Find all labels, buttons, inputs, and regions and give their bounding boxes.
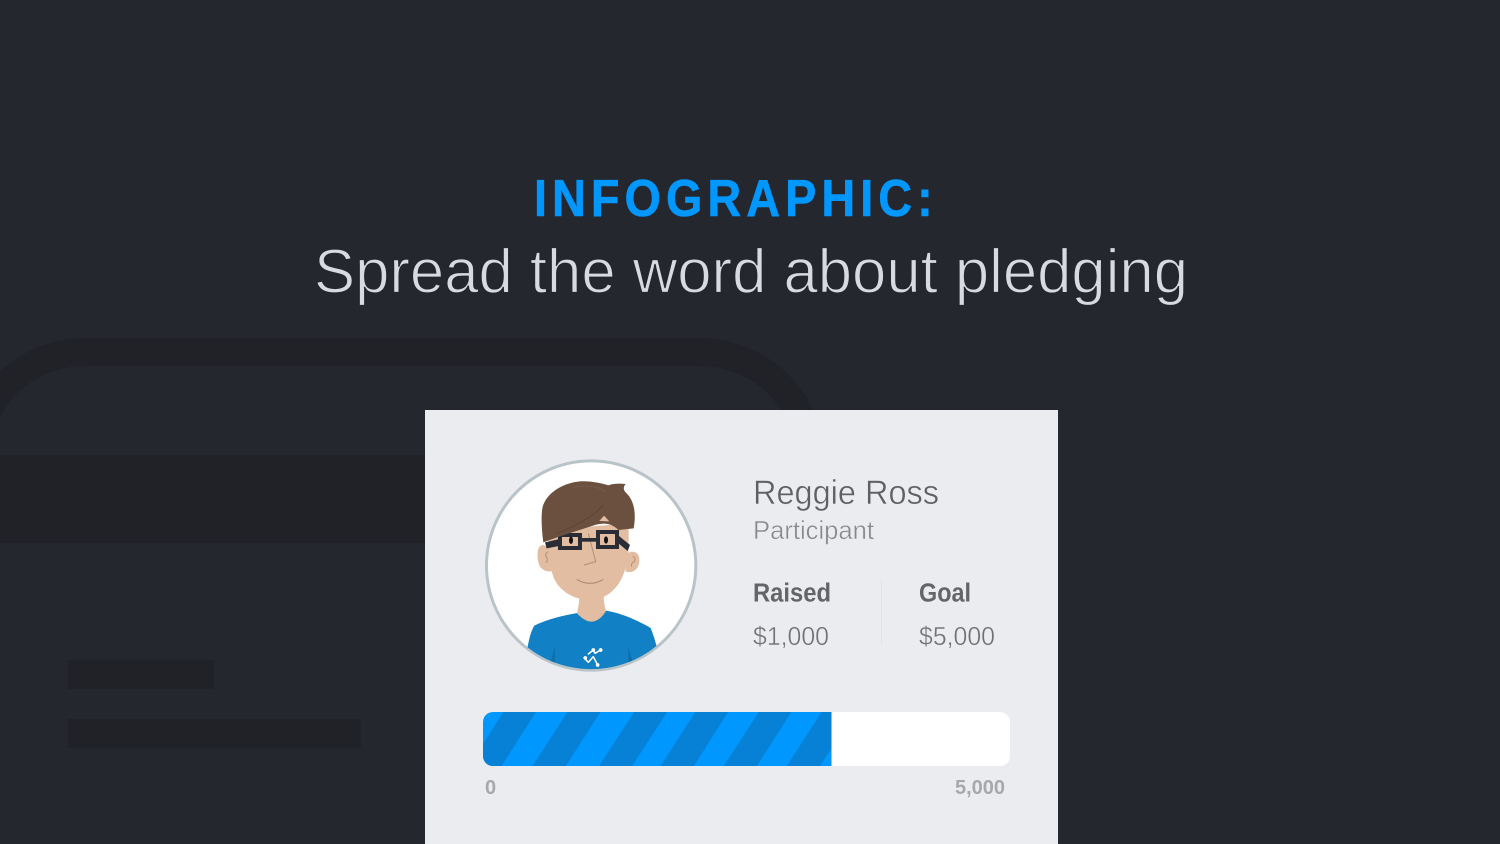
stat: raised: $1,000 xyxy=(753,623,829,651)
panel: participant card xyxy=(425,410,1058,844)
participant name: Reggie Ross xyxy=(753,474,939,512)
stat: raised: Raised xyxy=(753,580,831,608)
card background xyxy=(425,410,1058,844)
progress bar xyxy=(469,712,1010,766)
background dark band xyxy=(0,455,425,543)
infographic canvas xyxy=(0,179,1184,844)
background placeholder line long xyxy=(68,719,361,748)
participant role: Participant xyxy=(753,515,875,545)
avatar: Reggie Ross portrait xyxy=(486,461,696,677)
stat: raised xyxy=(753,580,831,651)
scale minimum label: 0 xyxy=(485,777,496,799)
heading: subtitle: Spread the word about pledging xyxy=(314,238,1188,306)
stat: goal xyxy=(919,580,995,651)
heading: infographic: INFOGRAPHIC: xyxy=(534,170,933,228)
background phone outline shape xyxy=(0,338,813,427)
background placeholder line short xyxy=(68,660,214,689)
stat: goal: $5,000 xyxy=(919,623,995,651)
scale maximum label: 5,000 xyxy=(955,777,1005,799)
stat: goal: Goal xyxy=(919,580,971,608)
